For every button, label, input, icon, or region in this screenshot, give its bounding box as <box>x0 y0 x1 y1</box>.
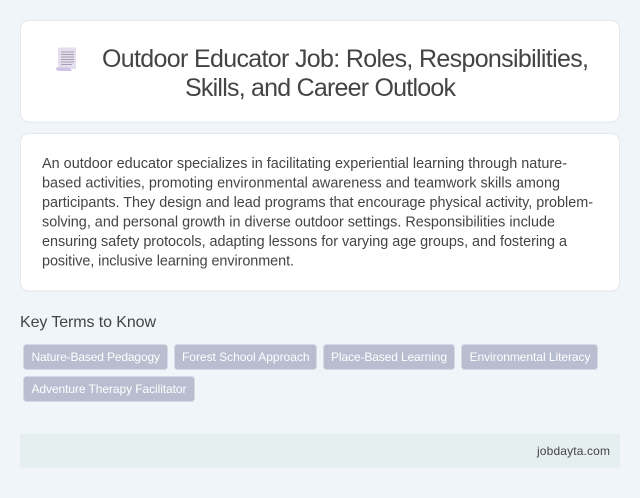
title: Skills, and Career Outlook <box>185 74 456 102</box>
icon: document scroll <box>56 48 76 71</box>
heading: key terms: Key Terms to Know <box>20 314 156 331</box>
text block: description: solving, and personal growth in diverse outdoor settings. Responsibilities include <box>42 214 555 230</box>
panel: description <box>20 134 620 291</box>
tag: adventure therapy facilitator: Adventure Therapy Facilitator <box>32 382 186 396</box>
text block: description: positive, inclusive learning environment. <box>42 254 294 270</box>
footer: jobdayta.com <box>536 444 610 458</box>
tag: environmental literacy: Environmental Literacy <box>470 350 590 364</box>
tag: place-based learning <box>324 344 454 370</box>
title <box>102 45 589 102</box>
tag: place-based learning: Place-Based Learning <box>331 350 447 364</box>
title: Outdoor Educator Job: Roles, Responsibilities, <box>102 45 589 73</box>
tags <box>24 344 598 402</box>
text block: description: An outdoor educator specializes in facilitating experiential learning through nature- <box>42 156 567 172</box>
tag: nature-based pedagogy: Nature-Based Pedagogy <box>32 350 160 364</box>
tag: forest school approach: Forest School Approach <box>182 350 310 364</box>
footer <box>20 434 620 468</box>
text block: description <box>42 156 593 270</box>
text block: description: based activities, promoting environmental awareness and teamwork skills among <box>42 176 560 192</box>
panel: title header <box>20 20 620 122</box>
text block: description: ensuring safety protocols, adapting lessons for varying age groups, and fostering a <box>42 234 567 250</box>
tag: forest school approach <box>174 344 316 370</box>
tag: environmental literacy <box>462 344 598 370</box>
tag: nature-based pedagogy <box>24 344 168 370</box>
text block: description: participants. They design and lead programs that encourage physical activity, problem- <box>42 195 593 211</box>
tag: adventure therapy facilitator <box>24 376 194 402</box>
